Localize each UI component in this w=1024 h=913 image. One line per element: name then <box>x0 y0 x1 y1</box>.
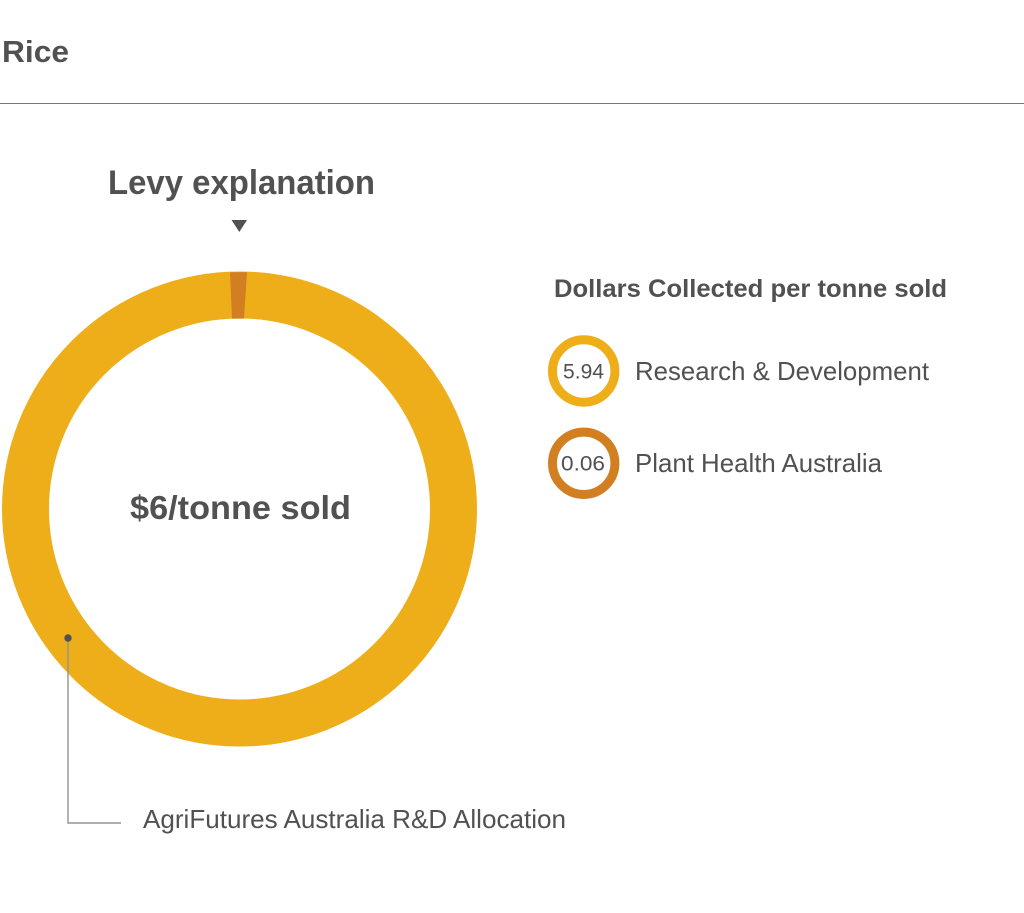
title: Rice <box>2 34 69 69</box>
callout: AgriFutures Australia R&D Allocation <box>64 634 566 834</box>
legend item: research and development <box>552 340 930 402</box>
heading: levy explanation: Levy explanation <box>108 164 375 202</box>
donut segment: research and development <box>26 295 454 723</box>
legend item: plant health australia: Plant Health Australia <box>635 448 883 478</box>
legend item: research and development: Research & Development <box>635 356 930 386</box>
legend item: plant health australia: 0.06 <box>561 452 605 476</box>
donut chart <box>26 272 454 723</box>
donut segment: plant health australia <box>230 272 247 319</box>
callout: AgriFutures Australia R&D Allocation: AgriFutures Australia R&D Allocation <box>143 804 566 834</box>
legend <box>552 275 947 494</box>
icon: down arrow <box>232 220 247 232</box>
legend item: plant health australia <box>552 432 883 494</box>
donut centre label: $6/tonne sold <box>130 489 351 526</box>
legend heading: Dollars Collected per tonne sold <box>554 275 947 303</box>
legend item: research and development: 5.94 <box>563 360 604 384</box>
